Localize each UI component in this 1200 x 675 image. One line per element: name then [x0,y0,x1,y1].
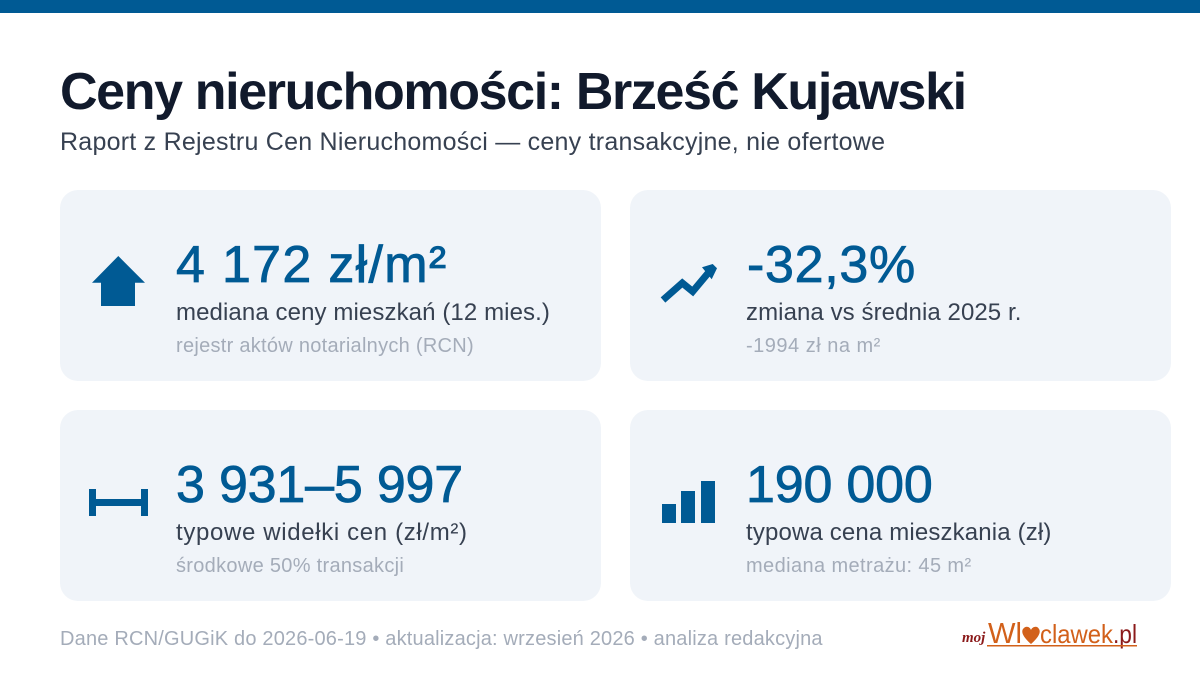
logo: Wl [988,618,1022,650]
value: range: 3 931–5 997 [176,456,463,514]
label: median price: mediana ceny mieszkań (12 mies.) [176,299,550,326]
value: change: -32,3% [747,236,916,294]
panel: median price [60,190,601,381]
label: typical price: typowa cena mieszkania (zł) [746,519,1052,546]
note: median price: rejestr aktów notarialnych (RCN) [176,334,474,356]
logo: clawek [1040,619,1114,649]
footer source: Dane RCN/GUGiK do 2026-06-19 • aktualizacja: wrzesień 2026 • analiza redakcyjna [60,628,823,650]
subtitle: Raport z Rejestru Cen Nieruchomości — ceny transakcyjne, nie ofertowe [60,128,885,156]
label: range: typowe widełki cen (zł/m²) [176,519,468,546]
panel: change [630,190,1171,381]
label: change: zmiana vs średnia 2025 r. [746,299,1021,326]
title: Ceny nieruchomości: Brześć Kujawski [60,63,966,121]
panel: typical price [630,410,1171,601]
logo: .pl [1113,619,1137,649]
logo: moj [962,630,986,646]
top bar [0,0,1200,13]
panel: range [60,410,601,601]
note: typical price: mediana metrażu: 45 m² [746,554,972,576]
value: typical price: 190 000 [746,456,933,514]
value: median price: 4 172 zł/m² [176,236,448,294]
note: range: środkowe 50% transakcji [176,554,404,576]
note: change: -1994 zł na m² [746,334,881,356]
